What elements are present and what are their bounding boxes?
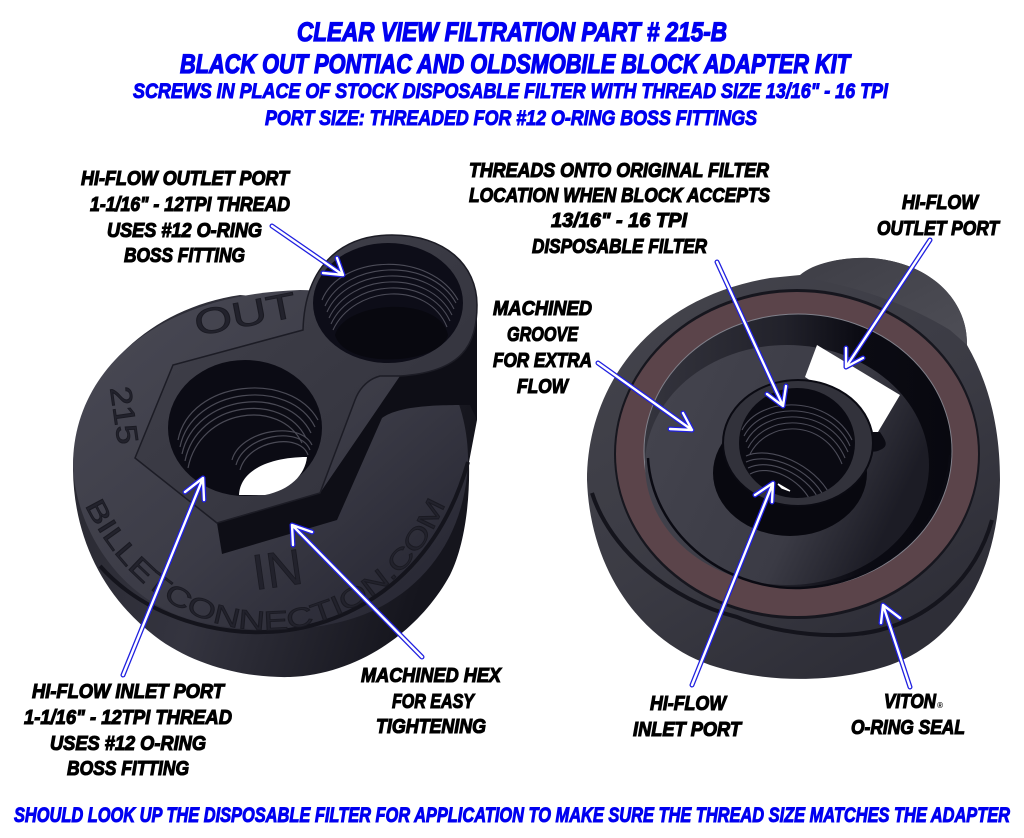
label: hi-flow outlet port, left: BOSS FITTING (124, 245, 245, 267)
label: hi-flow outlet port, right (877, 192, 1001, 240)
engraved text: OUT (191, 284, 300, 344)
label: machined groove: MACHINED (493, 298, 592, 320)
arrow: threads onto filter (717, 262, 786, 406)
label: hi-flow inlet port, left: HI-FLOW INLET PORT (32, 681, 226, 703)
label: threads onto original filter: LOCATION WHEN BLOCK ACCEPTS (469, 185, 771, 207)
tab (800, 258, 967, 345)
label: threads onto original filter: THREADS ONTO ORIGINAL FILTER (469, 160, 769, 182)
outlet port (313, 243, 463, 363)
label: hi-flow inlet port, left: USES #12 O-RING (50, 733, 206, 755)
title: CLEAR VIEW FILTRATION PART # 215-B (297, 17, 727, 47)
engraved text: 215 (103, 384, 144, 446)
label: machined groove: FLOW (517, 376, 570, 398)
label: threads onto original filter: DISPOSABLE FILTER (532, 236, 707, 258)
arrow: left outlet port (272, 226, 343, 275)
title: BLACK OUT PONTIAC AND OLDSMOBILE BLOCK ADAPTER KIT (180, 49, 852, 79)
threaded bore (739, 388, 855, 500)
label: viton o-ring seal (851, 691, 965, 739)
label: hi-flow outlet port, right: OUTLET PORT (877, 218, 1001, 240)
title (180, 17, 852, 79)
label: hi-flow inlet port, left: BOSS FITTING (67, 758, 189, 780)
label: machined hex (361, 665, 503, 738)
engraved text: BILLETCONNECTION.COM (86, 498, 445, 630)
label: machined hex: TIGHTENING (376, 716, 486, 738)
machined step (592, 493, 992, 635)
label: machined hex: MACHINED HEX (361, 665, 503, 687)
label: hi-flow outlet port, right: HI-FLOW (902, 192, 980, 214)
engraved text: IN (249, 538, 306, 601)
arrow: machined groove (598, 363, 692, 430)
arrow: right outlet port (846, 240, 930, 367)
label: hi-flow inlet port, left (24, 681, 232, 780)
label: hi-flow outlet port, left: USES #12 O-RING (107, 220, 262, 242)
o-ring seal (614, 289, 980, 619)
label: hi-flow inlet port, left: 1-1/16" - 12TPI THREAD (24, 707, 232, 729)
subtitle: SCREWS IN PLACE OF STOCK DISPOSABLE FILTER WITH THREAD SIZE 13/16" - 16 TPI (133, 80, 889, 103)
label: viton o-ring seal: VITON (884, 691, 936, 713)
arrow: right inlet port (692, 483, 773, 685)
arrow: left inlet port (123, 478, 204, 675)
inlet port (168, 360, 322, 496)
label: hi-flow outlet port, left: 1-1/16" - 12TPI THREAD (90, 194, 290, 216)
arrow: viton seal (881, 605, 910, 687)
label: machined hex: FOR EASY (392, 691, 475, 713)
label: viton o-ring seal: O-RING SEAL (851, 717, 965, 739)
arrow: machined hex (292, 525, 422, 657)
adapter body (587, 258, 1000, 679)
right adapter photo (587, 258, 1000, 679)
subtitle: PORT SIZE: THREADED FOR #12 O-RING BOSS FITTINGS (265, 107, 757, 130)
left adapter photo (73, 234, 478, 678)
engraved text (86, 284, 445, 630)
through hole (239, 457, 307, 495)
label: machined groove: GROOVE (507, 324, 579, 346)
adapter body (73, 295, 477, 677)
label: machined groove (493, 298, 592, 398)
label: hi-flow outlet port, left (81, 168, 291, 267)
boss wall (217, 300, 477, 554)
label: threads onto original filter: 13/16" - 16 TPI (551, 210, 687, 232)
label: hi-flow inlet port, right (633, 693, 743, 741)
recess wall (644, 314, 952, 588)
hub base (713, 410, 867, 536)
hex and outlet boss (135, 235, 477, 523)
label: hi-flow outlet port, left: HI-FLOW OUTLET PORT (81, 168, 291, 190)
label: threads onto original filter (469, 160, 771, 258)
flow window (805, 345, 900, 432)
adapter face (73, 290, 468, 630)
label: hi-flow inlet port, right: HI-FLOW (650, 693, 728, 715)
label: viton o-ring seal: ® (937, 701, 943, 710)
hub ring (723, 380, 873, 506)
recess floor (645, 345, 929, 585)
subtitle (133, 80, 889, 130)
label: hi-flow inlet port, right: INLET PORT (633, 719, 743, 741)
label: machined groove: FOR EXTRA (493, 350, 592, 372)
